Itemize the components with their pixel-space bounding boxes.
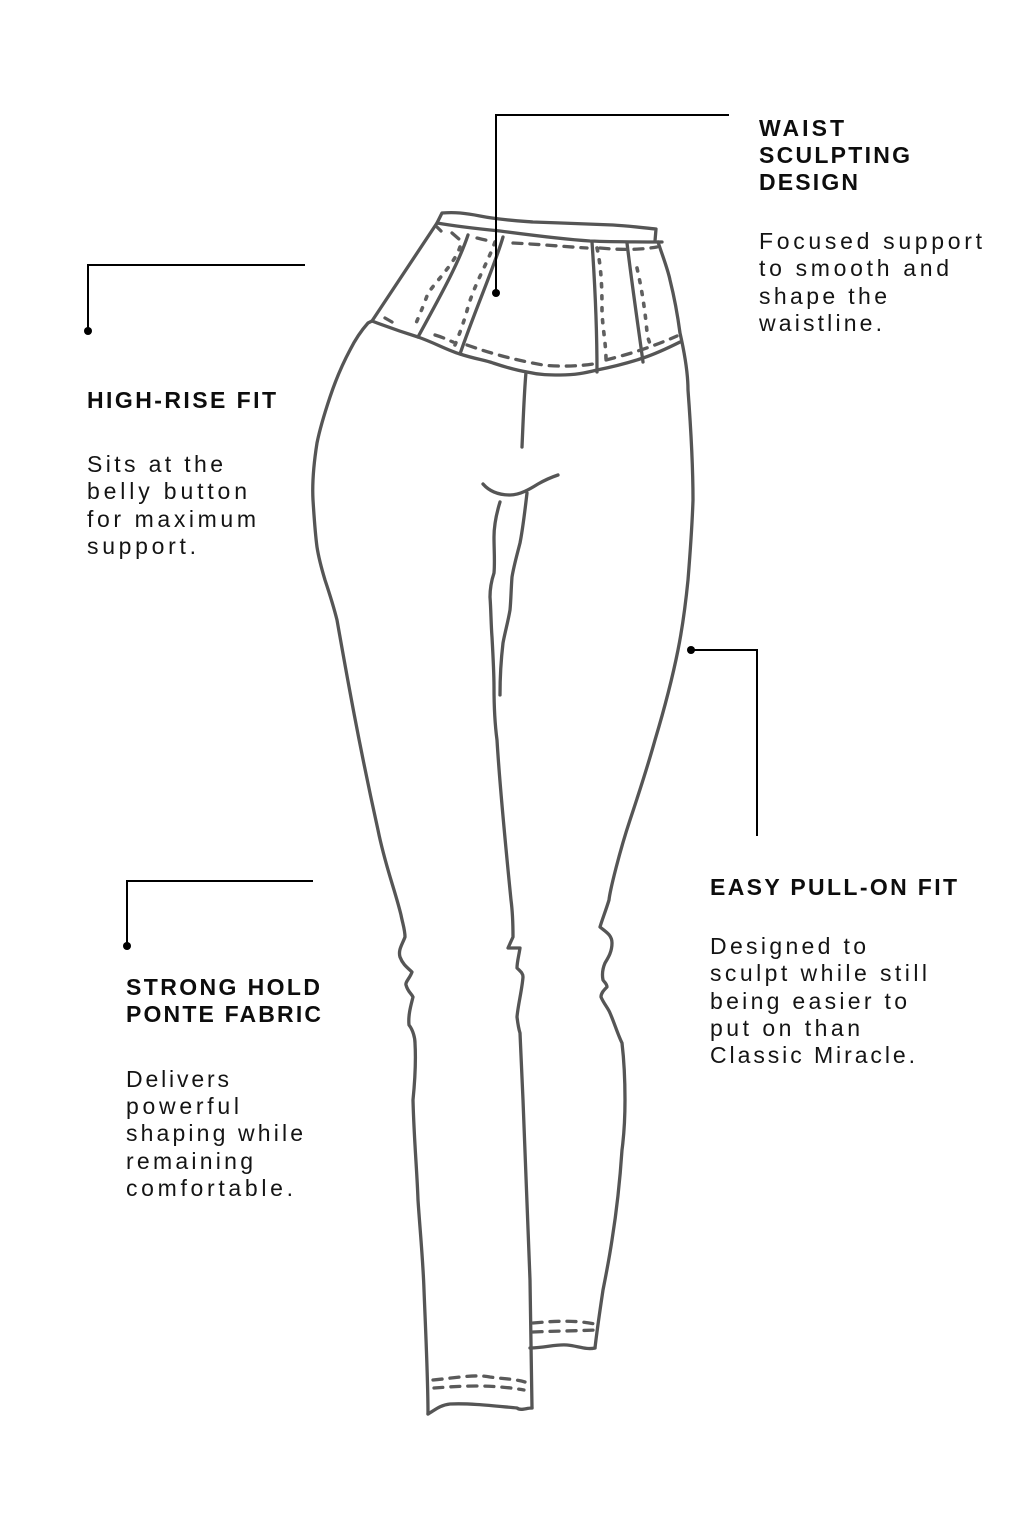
description: comfortable. (126, 1175, 293, 1201)
description: for maximum (87, 506, 256, 532)
description: put on than (710, 1015, 860, 1041)
heading: SCULPTING (759, 142, 910, 168)
callout: easy pull-on fit (687, 646, 957, 1068)
leader line (127, 881, 313, 946)
leader line (88, 265, 305, 331)
description: Delivers (126, 1066, 229, 1092)
heading: WAIST (759, 115, 844, 141)
heading: DESIGN (759, 169, 858, 195)
description: sculpt while still (710, 960, 927, 986)
right outer leg outline (595, 242, 693, 1348)
crotch curve (483, 475, 558, 495)
description (710, 933, 927, 1068)
description: support. (87, 533, 196, 559)
description: shaping while (126, 1120, 303, 1146)
inner leg outline (490, 502, 532, 1408)
description: powerful (126, 1093, 239, 1119)
callout: waist sculpting design (492, 115, 983, 336)
heading: HIGH-RISE FIT (87, 387, 276, 413)
heading: PONTE FABRIC (126, 1001, 321, 1027)
leader line (496, 115, 729, 293)
description: to smooth and (759, 255, 949, 281)
waist yoke lower seam (372, 321, 680, 375)
heading (759, 115, 910, 195)
illustration: high-rise leggings sketch (313, 213, 693, 1414)
callout: strong hold ponte fabric (123, 881, 321, 1201)
left leg hem (428, 1404, 532, 1414)
hem stitching (433, 1321, 595, 1390)
description: Classic Miracle. (710, 1042, 915, 1068)
right leg hem (530, 1345, 595, 1349)
description: waistline. (758, 310, 882, 336)
waist stitching (385, 226, 677, 366)
description: shape the (759, 283, 887, 309)
heading: EASY PULL-ON FIT (710, 874, 957, 900)
description (87, 451, 256, 559)
heading: STRONG HOLD (126, 974, 320, 1000)
left outer leg outline (313, 223, 437, 1414)
description (758, 228, 983, 336)
thigh crease (500, 493, 527, 695)
description: remaining (126, 1148, 253, 1174)
callout: high-rise fit (84, 265, 305, 559)
description: Designed to (710, 933, 866, 959)
waist panel seams (418, 235, 643, 372)
leader line (691, 650, 757, 836)
description: belly button (87, 478, 247, 504)
description (126, 1066, 303, 1201)
front center seam (522, 372, 526, 447)
description: Focused support (759, 228, 983, 254)
description: Sits at the (87, 451, 223, 477)
waistband top edge (437, 213, 662, 242)
description: being easier to (710, 988, 907, 1014)
heading (126, 974, 321, 1027)
